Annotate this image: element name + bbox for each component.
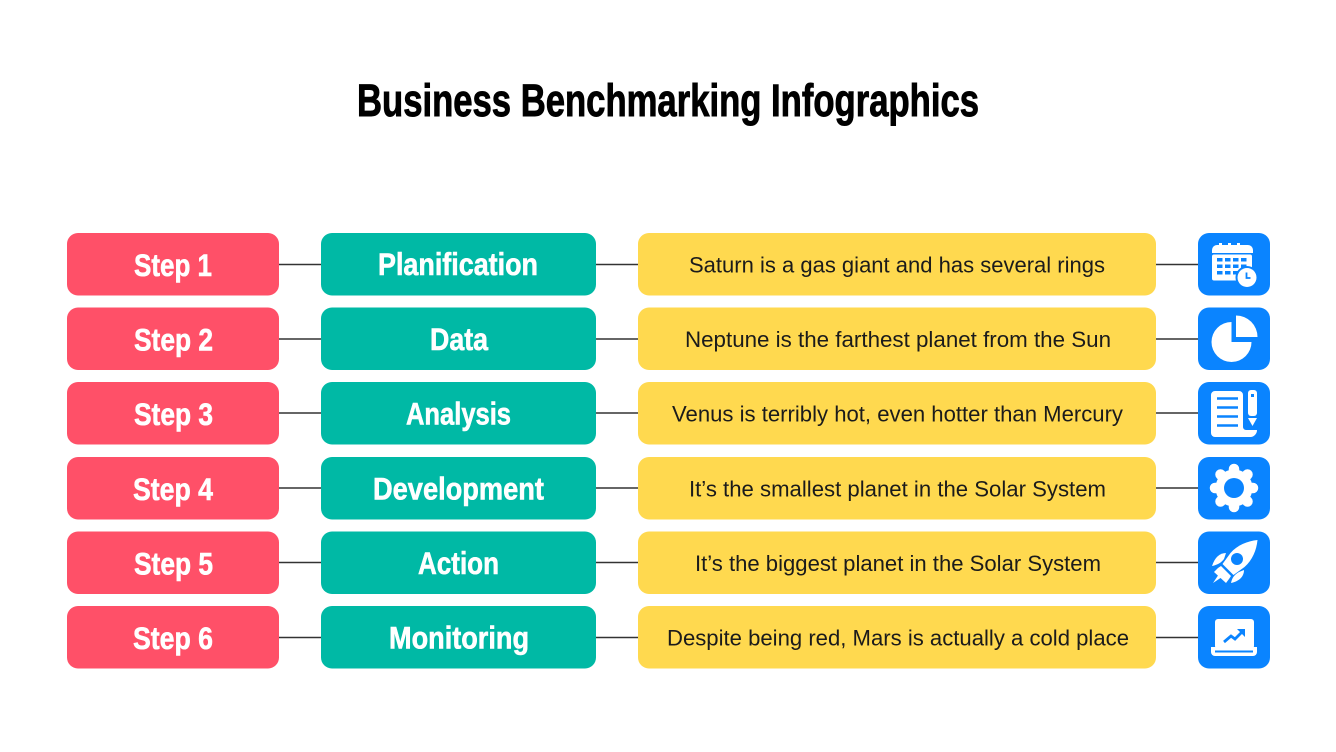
step 5 label: Step 5 bbox=[134, 546, 213, 582]
icon: rocket bbox=[1198, 532, 1270, 594]
row 3 bbox=[67, 382, 1270, 444]
neptune description bbox=[638, 308, 1156, 370]
planification label: Planification bbox=[378, 246, 538, 282]
development label: Development bbox=[373, 470, 544, 506]
step 1 label bbox=[67, 233, 279, 296]
row 1 bbox=[67, 233, 1270, 296]
venus description: Venus is terribly hot, even hotter than Mercury bbox=[672, 402, 1124, 426]
jupiter description: It’s the biggest planet in the Solar System bbox=[695, 551, 1101, 576]
mars description: Despite being red, Mars is actually a cold place bbox=[667, 626, 1129, 650]
step 2 label bbox=[67, 308, 279, 370]
action label: Action bbox=[418, 545, 499, 581]
development label bbox=[321, 457, 596, 520]
action label bbox=[321, 532, 596, 594]
saturn description bbox=[638, 233, 1156, 296]
step 4 label: Step 4 bbox=[133, 471, 213, 507]
neptune description: Neptune is the farthest planet from the Sun bbox=[685, 327, 1111, 352]
step 4 label bbox=[67, 457, 279, 520]
title: Business Benchmarking Infographics bbox=[357, 75, 979, 126]
row 4 bbox=[67, 457, 1270, 520]
step 1 label: Step 1 bbox=[134, 247, 212, 283]
saturn description: Saturn is a gas giant and has several rings bbox=[689, 252, 1105, 278]
row 2 bbox=[67, 308, 1270, 370]
analysis label: Analysis bbox=[406, 396, 511, 432]
data label bbox=[321, 308, 596, 370]
step 6 label: Step 6 bbox=[133, 620, 213, 656]
jupiter description bbox=[638, 532, 1156, 594]
monitoring label bbox=[321, 606, 596, 668]
icon: document and pencil bbox=[1198, 382, 1270, 444]
step 3 label: Step 3 bbox=[134, 396, 213, 432]
icon: calendar with clock bbox=[1198, 233, 1270, 296]
mercury description bbox=[638, 457, 1156, 520]
mars description bbox=[638, 606, 1156, 668]
row 6 bbox=[67, 606, 1270, 668]
row 5 bbox=[67, 532, 1270, 594]
venus description bbox=[638, 382, 1156, 444]
step 2 label: Step 2 bbox=[134, 322, 213, 358]
planification label bbox=[321, 233, 596, 296]
monitoring label: Monitoring bbox=[389, 620, 529, 656]
icon: laptop with trend arrow bbox=[1198, 606, 1270, 668]
connector lines bbox=[279, 264, 1198, 638]
mercury description: It’s the smallest planet in the Solar System bbox=[689, 476, 1106, 502]
analysis label bbox=[321, 382, 596, 444]
icon: pie chart bbox=[1198, 308, 1270, 370]
step 3 label bbox=[67, 382, 279, 444]
data label: Data bbox=[430, 321, 488, 357]
step 6 label bbox=[67, 606, 279, 668]
step 5 label bbox=[67, 532, 279, 594]
icon: gear bbox=[1198, 457, 1270, 520]
